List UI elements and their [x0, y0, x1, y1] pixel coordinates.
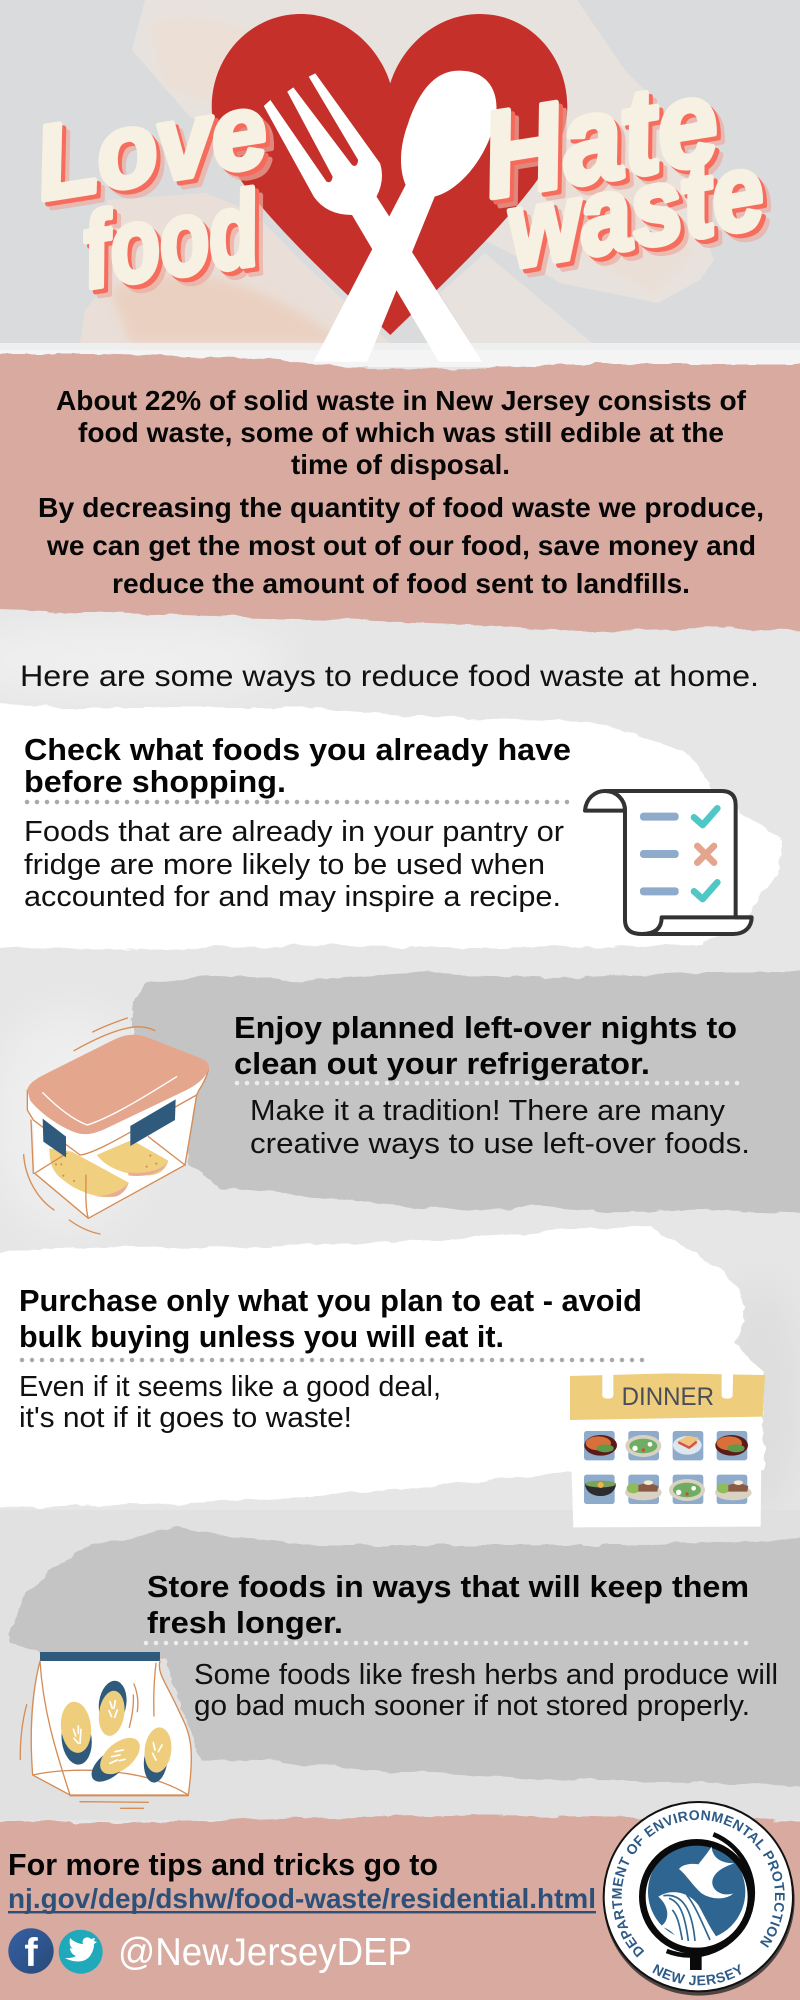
heart [212, 14, 567, 335]
intro paragraph two: By decreasing the quantity of food waste we produce, [38, 492, 764, 523]
icon: twitter [59, 1930, 103, 1974]
body text [19, 1371, 441, 1434]
panel: store foods [8, 1528, 800, 1808]
heading: Store foods in ways that will keep them [147, 1570, 749, 1604]
heading: bulk buying unless you will eat it. [19, 1320, 504, 1354]
body text [194, 1659, 778, 1722]
icon: checklist scroll [585, 791, 752, 934]
body text: fridge are more likely to be used when [24, 849, 545, 881]
fork and spoon icon [264, 71, 496, 362]
dish: sandwich [673, 1436, 702, 1455]
dish: noodle bowl [584, 1435, 617, 1456]
body text [24, 816, 565, 913]
icon: food container [24, 1018, 209, 1234]
heading [24, 733, 571, 799]
title: Hate waste [473, 52, 772, 291]
body text: Even if it seems like a good deal, [19, 1371, 441, 1403]
header brush strokes [0, 0, 800, 367]
dish: salad [625, 1435, 661, 1457]
body text: creative ways to use left-over foods. [250, 1128, 750, 1160]
icon: storage bag [20, 1652, 191, 1808]
icon: facebook: f [24, 1931, 38, 1975]
heading [19, 1284, 642, 1354]
intro paragraph one: About 22% of solid waste in New Jersey consists of [56, 385, 747, 416]
dish: salad [669, 1479, 705, 1501]
title: Love food [27, 71, 275, 311]
footer link: nj.gov/dep/dshw/food-waste/residential.html [8, 1883, 596, 1914]
intro paragraph one: time of disposal. [291, 449, 510, 480]
heading: clean out your refrigerator. [234, 1047, 650, 1081]
heading [147, 1570, 749, 1640]
intro paragraph two: we can get the most out of our food, save money and [46, 530, 756, 561]
icon: dinner calendar [570, 1358, 765, 1527]
intro paragraph one [56, 385, 747, 480]
title: Hate waste: Hate [473, 52, 727, 224]
body text: Some foods like fresh herbs and produce will [194, 1659, 778, 1691]
panel: left-over nights [24, 972, 800, 1234]
footer band [0, 1801, 800, 2000]
heading: Enjoy planned left-over nights to [234, 1011, 737, 1045]
heading: Purchase only what you plan to eat - avoid [19, 1284, 642, 1318]
panel: purchase only what you plan [0, 1227, 765, 1527]
heading: before shopping. [24, 765, 286, 799]
seal: department of environmental protection: NEW JERSEY [652, 1964, 742, 1986]
lead-in sentence: Here are some ways to reduce food waste at home. [20, 660, 759, 693]
panel: check foods [0, 704, 782, 950]
icon: facebook [8, 1928, 54, 1975]
intro paragraph two: reduce the amount of food sent to landfills. [112, 568, 690, 599]
seal: department of environmental protection: DEPARTMENT OF ENVIRONMENTAL PROTECTION [612, 1810, 785, 1958]
heading [234, 1011, 737, 1081]
body text: accounted for and may inspire a recipe. [24, 881, 561, 913]
body text: go bad much sooner if not stored properly. [194, 1690, 750, 1722]
body text: Foods that are already in your pantry or [24, 816, 565, 848]
heading: Check what foods you already have [24, 733, 571, 767]
title: Love food: food [75, 169, 267, 311]
body text: Make it a tradition! There are many [250, 1095, 726, 1127]
footer call to action: For more tips and tricks go to [8, 1848, 438, 1882]
dish: rice plate [715, 1480, 752, 1500]
intro panel [0, 354, 800, 632]
dish: noodle bowl [715, 1435, 748, 1456]
dish: rice plate [625, 1480, 662, 1500]
body text: it's not if it goes to waste! [19, 1402, 352, 1434]
intro paragraph one: food waste, some of which was still edible at the [78, 417, 724, 448]
icon: dinner calendar: DINNER [622, 1383, 714, 1411]
title: Love food: Love [27, 71, 275, 223]
social handle: @NewJerseyDEP [118, 1931, 412, 1974]
heading: fresh longer. [147, 1606, 343, 1640]
body text [250, 1095, 750, 1160]
intro paragraph two [38, 492, 764, 599]
dish: black bowl [585, 1481, 616, 1496]
